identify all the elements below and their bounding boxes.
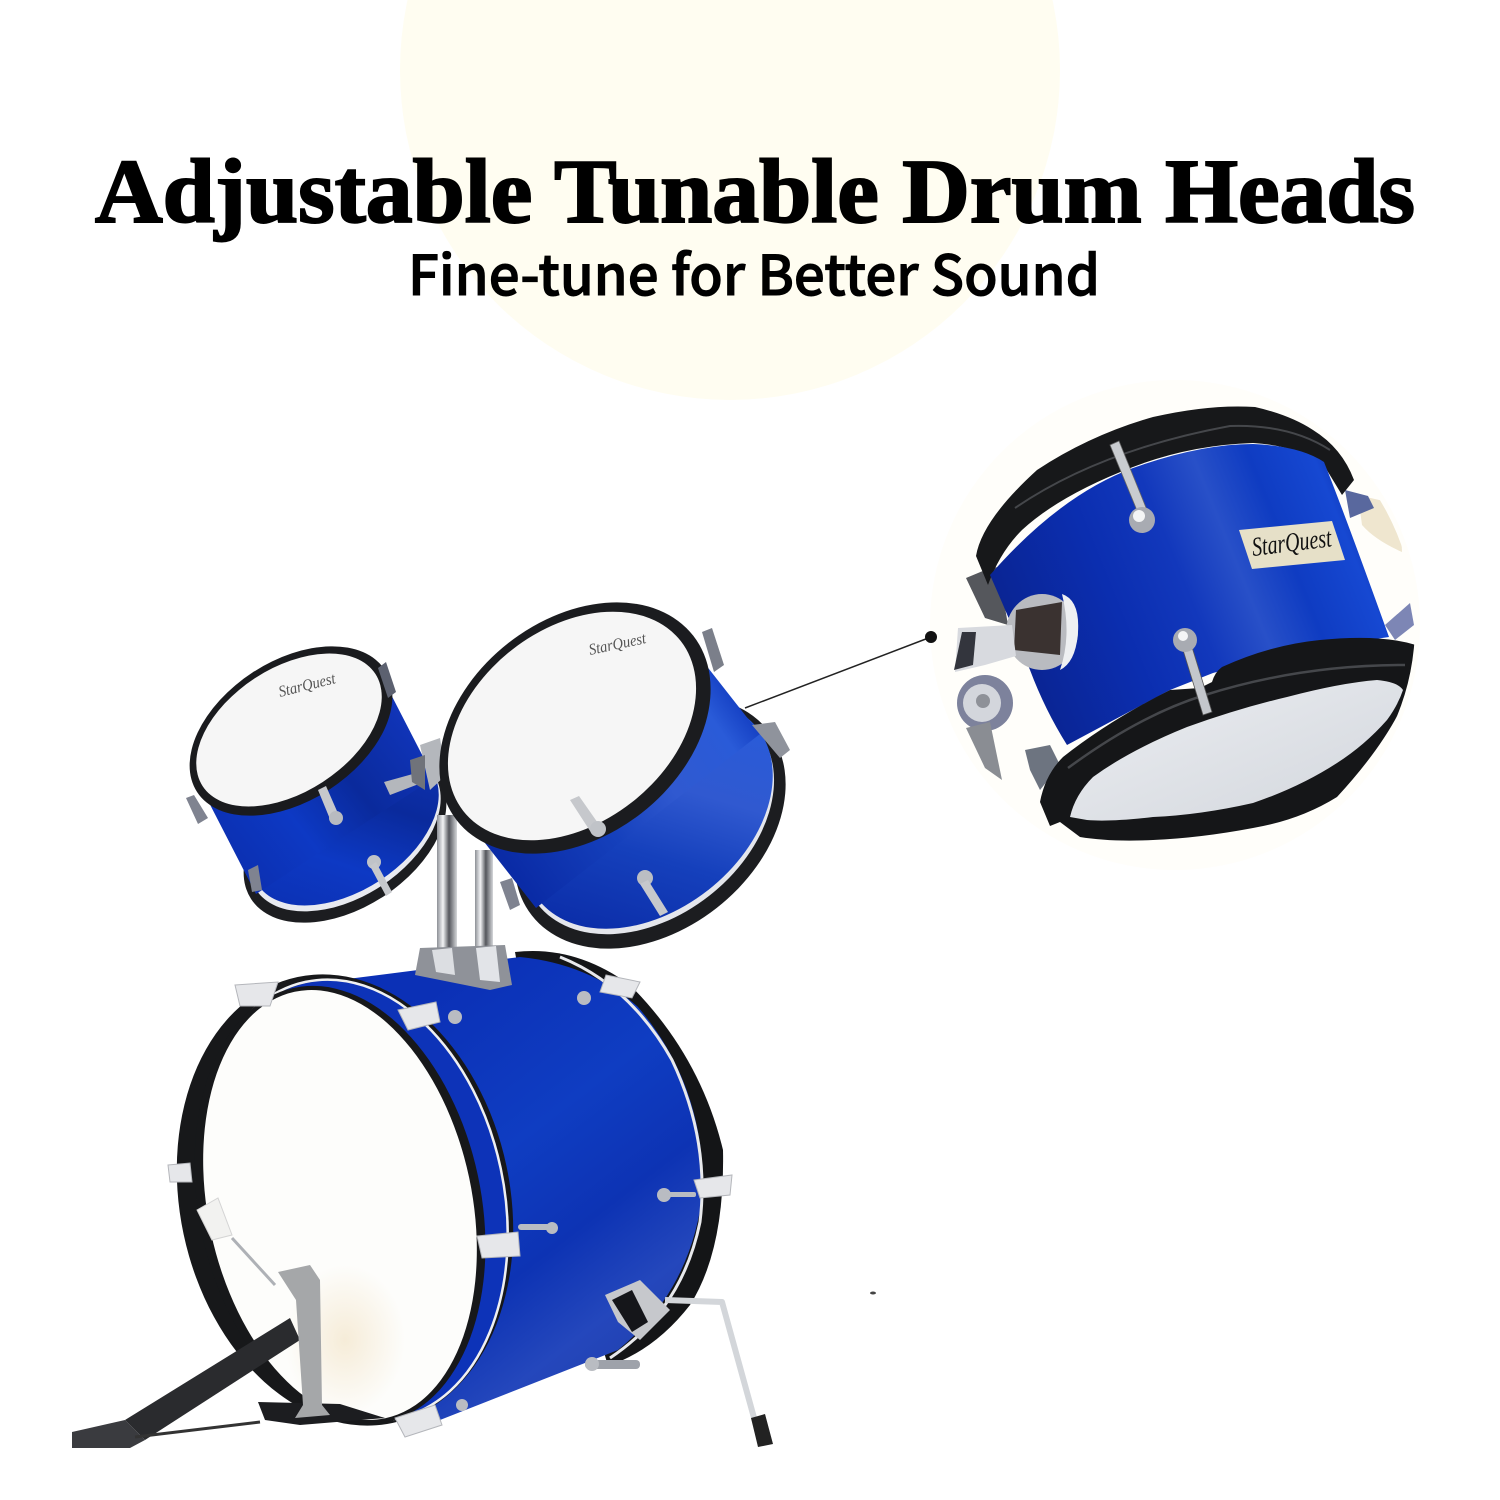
- front white head: [166, 964, 514, 1446]
- lug bolts: [448, 991, 696, 1411]
- top hoop: [159, 611, 423, 851]
- rear rim line: [560, 957, 702, 1358]
- badge: StarQuest: [1250, 522, 1334, 562]
- base plate: [258, 1402, 385, 1425]
- leg: [665, 1300, 756, 1425]
- tom mount hardware: [384, 738, 446, 795]
- pedal tower: [278, 1265, 330, 1418]
- toe block: [72, 1420, 145, 1448]
- badge: [1239, 521, 1345, 569]
- stand base clamp: [415, 945, 512, 990]
- right rack tom: [390, 551, 835, 1000]
- rubber foot: [751, 1414, 773, 1447]
- bass pedal: [72, 1198, 385, 1448]
- lower lug: [1025, 745, 1060, 790]
- left rack tom: [159, 611, 477, 958]
- head logo: StarQuest: [277, 670, 338, 701]
- rear hoop: [515, 951, 723, 1366]
- chrome hoop line: [157, 950, 547, 1450]
- chrome stand posts: [437, 815, 493, 950]
- small speck: [870, 1292, 876, 1294]
- head surround: [156, 959, 524, 1451]
- callout leader line: [745, 631, 937, 708]
- shell: [223, 719, 467, 937]
- head logo: StarQuest: [587, 630, 648, 659]
- chrome tom mount: [954, 594, 1078, 780]
- blue band between head and hoop: [160, 952, 546, 1448]
- lugs: [570, 796, 600, 834]
- front hoop black: [136, 943, 554, 1457]
- leg mount: [605, 1280, 670, 1340]
- shell: [300, 957, 703, 1420]
- hoop brackets: [168, 975, 732, 1437]
- bottom black hoop: [1040, 638, 1416, 841]
- footboard: [125, 1318, 300, 1440]
- pale yellow background circle: [400, 0, 1060, 400]
- callout: zoomed tom drum: [954, 406, 1414, 841]
- right lower lug: [1385, 603, 1414, 640]
- bass drum: [136, 943, 773, 1457]
- bottom hoop highlight: [1068, 665, 1405, 768]
- left upper lug: [966, 567, 1008, 625]
- subtitle: Fine-tune for Better Sound: [408, 231, 1100, 311]
- bottom white head: [1070, 680, 1403, 821]
- tension rod top: [1110, 441, 1155, 533]
- hoop highlight: [1015, 426, 1330, 508]
- rear hoop: [213, 718, 477, 958]
- top hoop: [390, 551, 760, 905]
- right upper lug: [1345, 490, 1374, 518]
- lugs: [318, 786, 340, 824]
- top black hoop: [976, 406, 1354, 585]
- pedal link rod: [135, 1422, 260, 1437]
- drum shell: [990, 444, 1389, 745]
- beater: [197, 1198, 232, 1240]
- cymbal fragment: [1358, 495, 1402, 552]
- tension rod bottom: [1173, 628, 1212, 715]
- title: Adjustable Tunable Drum Heads: [95, 141, 1415, 242]
- rear hoop: [465, 646, 835, 1000]
- shell: [479, 652, 817, 976]
- head warm stain: [285, 1265, 405, 1415]
